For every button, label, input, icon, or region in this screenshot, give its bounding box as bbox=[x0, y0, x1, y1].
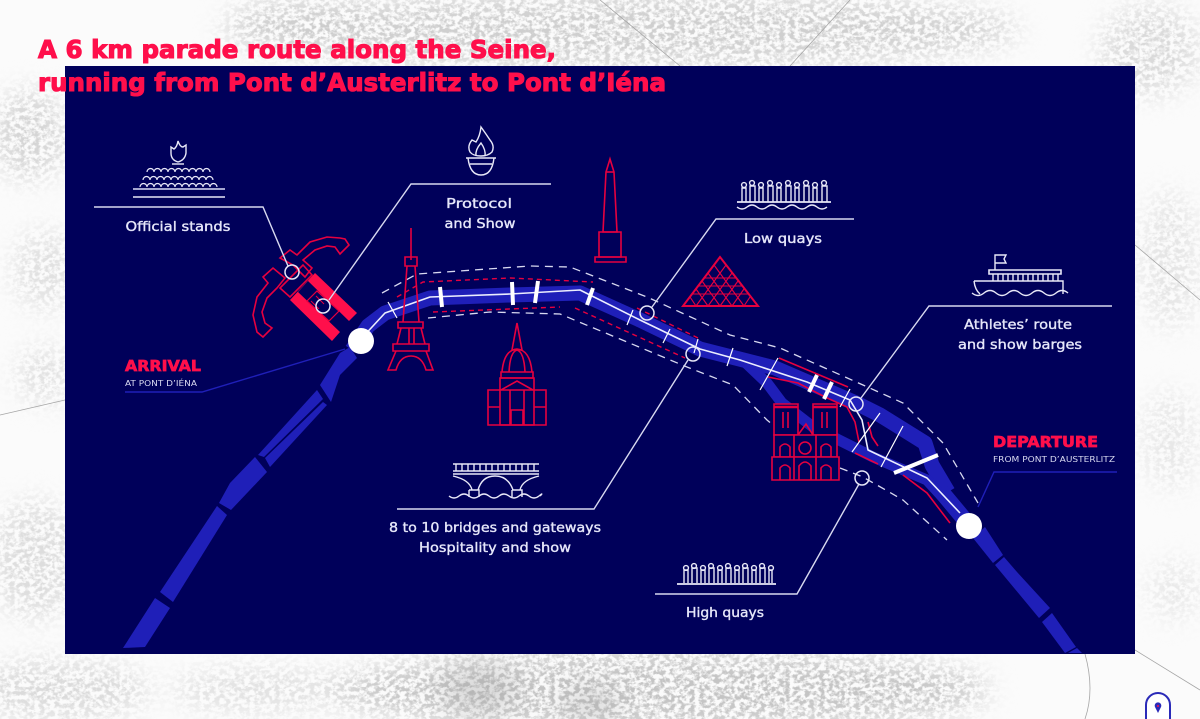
callout: arrival: ARRIVAL bbox=[125, 357, 201, 375]
bridges across the Seine bbox=[388, 281, 938, 473]
callout: bridges and gateways bbox=[389, 347, 700, 556]
callout: low quays: Low quays bbox=[744, 232, 822, 247]
callout: bridges and gateways: Hospitality and show bbox=[419, 541, 571, 556]
icon: flame and stands bbox=[133, 141, 225, 197]
red dashed quay limits bbox=[397, 278, 698, 358]
river Seine bbox=[123, 293, 1082, 653]
callout: athletes' route and show barges: and show barges bbox=[958, 338, 1082, 353]
callout: official stands bbox=[94, 141, 299, 279]
icon: crowd bbox=[677, 564, 776, 584]
icon: torch bbox=[466, 127, 496, 175]
icon: crowd above water bbox=[737, 181, 831, 209]
red icon: Notre-Dame bbox=[772, 404, 839, 480]
title: running from Pont d’Austerlitz to Pont d’Iéna bbox=[38, 68, 666, 97]
athletes' route bbox=[360, 290, 960, 513]
icon: barge bbox=[972, 255, 1068, 296]
callout: arrival: AT PONT D’IÉNA bbox=[125, 379, 198, 388]
red solid lines: low quays near the islands bbox=[768, 358, 950, 523]
callout: departure bbox=[978, 433, 1117, 507]
red icon: Louvre Pyramid bbox=[683, 257, 758, 306]
red icon: Invalides bbox=[488, 323, 546, 425]
callout: official stands: Official stands bbox=[126, 220, 231, 235]
red icon: Obelisk bbox=[595, 159, 626, 262]
callout: departure: FROM PONT D’AUSTERLITZ bbox=[993, 455, 1115, 464]
callout: athletes' route and show barges bbox=[849, 255, 1112, 411]
title bbox=[38, 35, 666, 97]
panel: navy map area bbox=[65, 66, 1135, 654]
callout: athletes' route and show barges: Athletes’ route bbox=[964, 318, 1072, 333]
callout: protocol and show: Protocol bbox=[446, 197, 512, 212]
callout: protocol and show bbox=[316, 127, 551, 313]
departure and arrival points bbox=[348, 328, 982, 539]
red icon: Eiffel Tower bbox=[388, 228, 433, 370]
callout: high quays: High quays bbox=[686, 606, 764, 621]
callout: low quays bbox=[640, 181, 854, 320]
callout: protocol and show: and Show bbox=[444, 217, 516, 232]
icon: bridge bbox=[449, 464, 542, 498]
icon: location pin button bbox=[1146, 693, 1170, 719]
outer dashed limits of the secure zone bbox=[382, 266, 978, 540]
callout: bridges and gateways: 8 to 10 bridges and gateways bbox=[389, 521, 601, 536]
callout: arrival bbox=[125, 349, 345, 392]
callout: high quays bbox=[655, 471, 869, 621]
callout: departure: DEPARTURE bbox=[993, 433, 1098, 451]
red icon: Trocadero stands bbox=[253, 237, 357, 341]
title: A 6 km parade route along the Seine, bbox=[38, 35, 556, 64]
